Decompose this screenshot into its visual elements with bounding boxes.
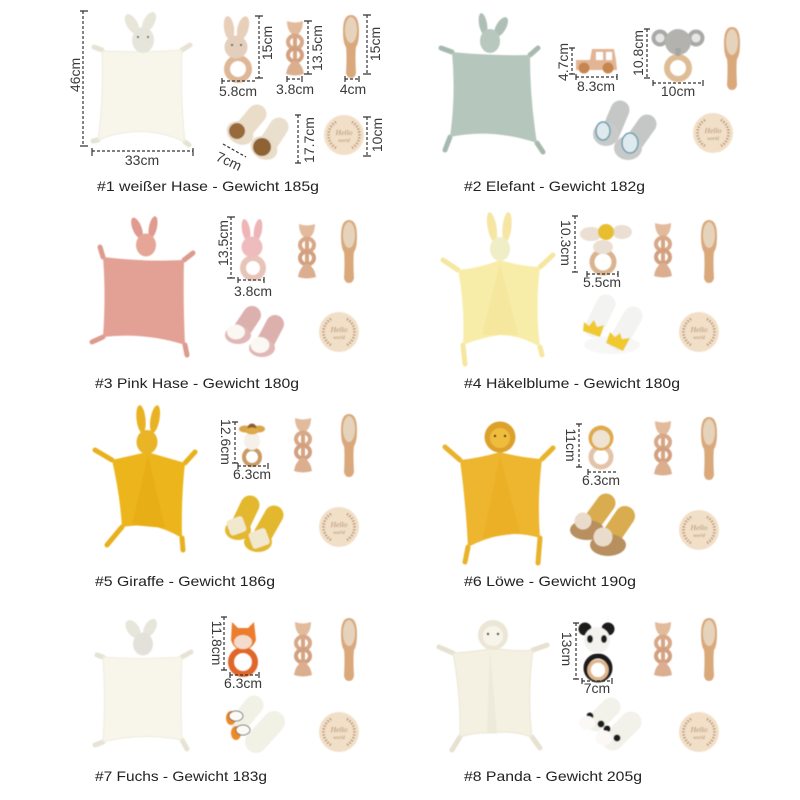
panel: #8 Panda	[439, 618, 719, 784]
dimension: 10cm	[653, 80, 703, 99]
socks: bear	[222, 114, 282, 165]
wooden teether	[286, 21, 304, 76]
wooden disc	[319, 712, 359, 752]
dimension: 5.5cm: 5.5cm	[583, 274, 621, 290]
wooden disc	[679, 510, 719, 550]
dimension: 5.8cm: 5.8cm	[219, 83, 257, 99]
wooden brush	[341, 220, 357, 283]
rattle: fox	[231, 622, 256, 674]
caption: #4 Häkelblume - Gewicht 180g	[464, 375, 680, 391]
blanket: pale yellow rabbit	[443, 211, 553, 364]
socks: lion	[570, 503, 626, 556]
wooden brush	[724, 27, 740, 90]
wooden disc	[693, 113, 733, 153]
panel: #7 Fuchs	[95, 617, 359, 784]
dimension: 3.8cm: 3.8cm	[276, 81, 314, 97]
blanket: pink rabbit	[92, 215, 193, 355]
socks: cat	[225, 315, 275, 357]
rattle: pink bunny	[240, 218, 264, 278]
dimension: 46cm: 46cm	[67, 58, 83, 92]
dimension: 33cm	[92, 148, 193, 168]
blanket: white rabbit	[95, 617, 191, 749]
dimension: 46cm	[67, 11, 88, 146]
wooden teether	[294, 622, 312, 676]
socks: grey	[593, 110, 647, 160]
dimension: 13cm: 13cm	[559, 632, 575, 666]
caption: #2 Elefant - Gewicht 182g	[464, 178, 645, 194]
wooden disc	[324, 115, 364, 155]
dimension: 17.7cm	[295, 115, 317, 163]
blanket: cream lion	[439, 620, 547, 750]
wooden teether	[298, 224, 316, 278]
socks: white with orange	[226, 705, 274, 742]
dimension: 13.5cm	[304, 21, 325, 74]
caption: #3 Pink Hase - Gewicht 180g	[95, 375, 299, 391]
dimension: 10.3cm: 10.3cm	[558, 220, 574, 266]
wooden teether	[654, 622, 672, 676]
dimension: 15cm	[363, 15, 383, 74]
caption: #5 Giraffe - Gewicht 186g	[95, 573, 275, 589]
dimension: 6.3cm: 6.3cm	[224, 675, 262, 691]
dimension: 4cm: 4cm	[340, 81, 366, 97]
panel: #6 Löwe	[445, 417, 719, 589]
rattle: lion	[588, 426, 614, 467]
dimension: 13.5cm: 13.5cm	[309, 25, 325, 71]
wooden teether	[294, 418, 312, 472]
caption: #6 Löwe - Gewicht 190g	[464, 573, 636, 589]
dimension: 13.5cm	[215, 217, 235, 278]
wooden brush	[701, 618, 717, 681]
caption: #1 weißer Hase - Gewicht 185g	[97, 178, 319, 194]
wooden disc	[679, 712, 719, 752]
wooden brush	[701, 417, 717, 480]
dimension: 33cm: 33cm	[125, 152, 159, 168]
panel: #1 weißer Hase	[67, 10, 385, 194]
dimension: 15cm: 15cm	[259, 26, 275, 60]
rattle: giraffe	[239, 424, 265, 465]
panel: #3 Pink Hase	[92, 215, 359, 391]
dimension: 15cm	[255, 16, 275, 78]
wooden car	[576, 49, 617, 74]
wooden brush	[343, 15, 359, 78]
wooden brush	[341, 618, 357, 681]
dimension: 4.7cm: 4.7cm	[555, 43, 571, 81]
dimension: 10.8cm: 10.8cm	[630, 30, 646, 76]
dimension: 11cm: 11cm	[563, 428, 579, 462]
dimension: 12.6cm: 12.6cm	[218, 419, 234, 465]
dimension: 8.3cm: 8.3cm	[577, 78, 615, 94]
wooden teether	[654, 223, 672, 278]
wooden disc	[319, 312, 359, 352]
dimension: 6.3cm: 6.3cm	[233, 466, 271, 482]
socks: yellow giraffe	[225, 505, 274, 552]
blanket: white rabbit	[93, 10, 190, 145]
dimension: 11cm	[563, 424, 582, 467]
dimension: 10cm: 10cm	[369, 118, 385, 152]
dimension: 13.5cm: 13.5cm	[215, 220, 231, 266]
dimension: 7cm: 7cm	[584, 680, 610, 696]
blanket: mustard rabbit	[95, 404, 195, 550]
socks: crown	[583, 304, 640, 354]
blanket: mustard lion	[445, 422, 553, 563]
dimension: 3.8cm: 3.8cm	[234, 283, 272, 299]
panel: #5 Giraffe	[95, 404, 359, 589]
panel: #2 Elefant	[441, 12, 740, 194]
socks: panda	[579, 707, 631, 746]
dimension: 13cm	[559, 623, 579, 679]
dimension: 7cm: 7cm	[214, 148, 244, 174]
caption: #7 Fuchs - Gewicht 183g	[95, 768, 267, 784]
dimension: 10cm: 10cm	[661, 83, 695, 99]
dimension: 6.3cm: 6.3cm	[582, 472, 620, 488]
panel: #4 Häkelblume	[443, 211, 719, 391]
wooden disc	[319, 507, 359, 547]
wooden brush	[701, 220, 717, 283]
wooden disc	[679, 312, 719, 352]
caption: #8 Panda - Gewicht 205g	[464, 768, 642, 784]
dimension: 10cm	[363, 117, 385, 156]
rattle: panda	[578, 622, 614, 680]
blanket: sage rabbit	[441, 12, 543, 152]
wooden brush	[341, 414, 357, 477]
dimension: 17.7cm: 17.7cm	[301, 117, 317, 163]
rattle: bunny	[222, 15, 251, 80]
dimension: 11.8cm: 11.8cm	[209, 621, 225, 665]
wooden teether	[654, 421, 672, 476]
dimension: 15cm: 15cm	[367, 27, 383, 61]
rattle: elephant	[652, 29, 704, 79]
dimension: 10.3cm	[558, 216, 578, 272]
rattle: crochet flower	[580, 224, 632, 273]
